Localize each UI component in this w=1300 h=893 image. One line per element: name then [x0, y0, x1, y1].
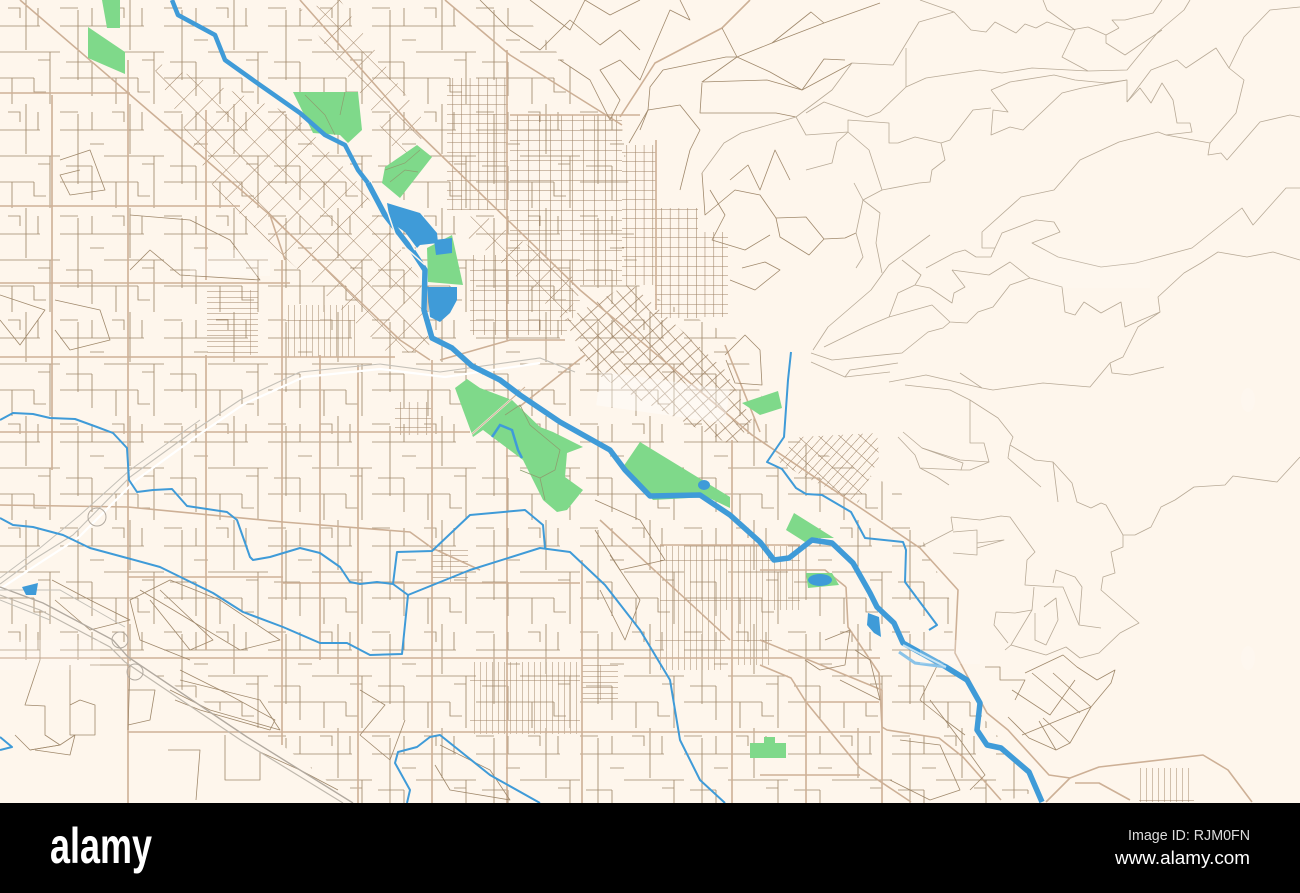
- faded watermark patches: [0, 250, 1255, 670]
- river and ponds: [22, 0, 1042, 802]
- downtown street grid: [565, 283, 752, 447]
- hillside residential streets: [0, 0, 1115, 800]
- park: eastern riverside park: [623, 442, 730, 508]
- park: top-left parcels: [88, 0, 125, 74]
- park: small parks east: [742, 391, 839, 758]
- website: www.alamy.com: [1114, 848, 1250, 868]
- highway interchange: [0, 358, 575, 803]
- park: riverside strip: [427, 235, 463, 285]
- park: kathryn albertson area: [382, 145, 432, 198]
- park: large western riverside park: [455, 379, 583, 512]
- footer band: [0, 803, 1300, 893]
- park: north riverside: [293, 92, 362, 143]
- alamy logo: alamy: [50, 818, 152, 874]
- image id: Image ID: RJM0FN: [1128, 827, 1250, 844]
- dense street grids: [207, 78, 1194, 802]
- suburban street texture: [0, 0, 1040, 803]
- foothill contour roads: [702, 0, 1300, 658]
- canals and creeks: [0, 352, 937, 803]
- north-west diagonal street grid: [150, 0, 585, 355]
- east end street grid: [775, 433, 879, 503]
